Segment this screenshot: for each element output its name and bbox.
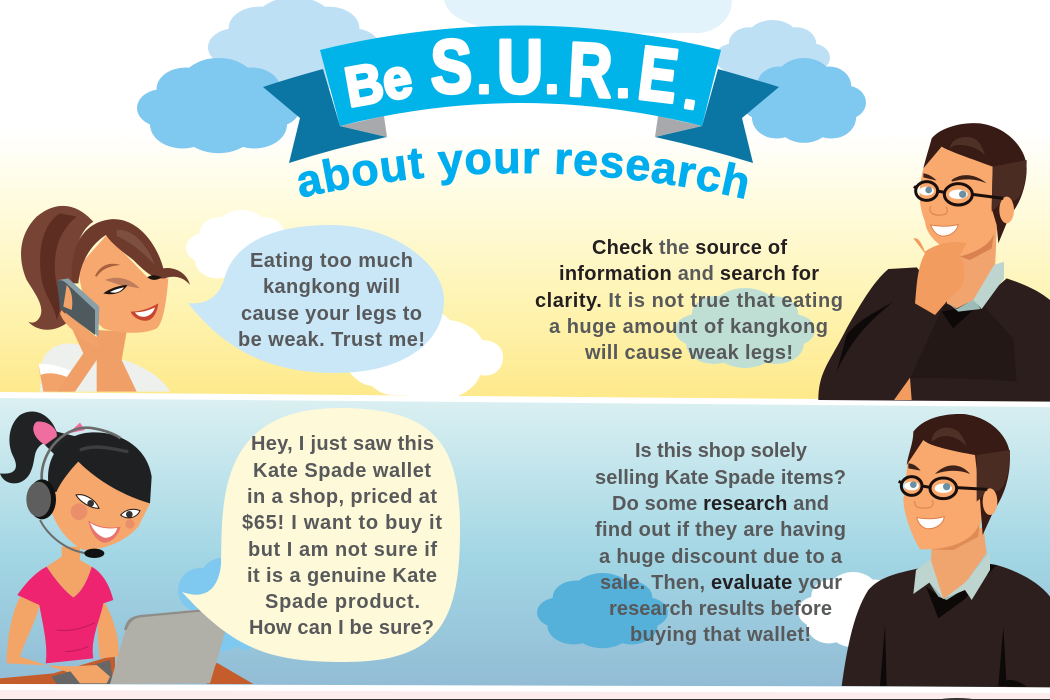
title banner: R — [566, 27, 614, 114]
title banner: Be — [340, 46, 417, 119]
text block: is this shop: selling Kate Spade items? — [595, 467, 846, 489]
text block: is this shop: buying that wallet! — [630, 624, 811, 646]
title banner: . — [616, 52, 630, 108]
text block: is this shop: Do some research and — [612, 493, 829, 515]
speech bubble 2 with laptop and woman: How can I be sure? — [249, 617, 434, 639]
speech bubble 2 with laptop and woman: in a shop, priced at — [247, 486, 437, 508]
title banner: E — [634, 31, 682, 119]
text block: check the source: clarity. It is not true that eating — [535, 290, 843, 312]
speech bubble 1: Eating too much — [250, 250, 413, 272]
panel: blue background — [0, 398, 1050, 687]
title header clouds — [137, 0, 866, 153]
speech bubble 1: kangkong will — [263, 276, 400, 298]
title banner: . — [545, 48, 559, 104]
speech bubble 2 with laptop and woman: Spade product. — [265, 591, 420, 613]
title banner: S — [430, 23, 473, 109]
speech bubble 2 with laptop and woman: Hey, I just saw this — [251, 433, 434, 455]
text block: is this shop: Is this shop solely — [635, 440, 808, 462]
speech bubble 2 with laptop and woman: it is a genuine Kate — [247, 565, 437, 587]
title banner — [263, 23, 779, 163]
speech bubble 2 with laptop and woman: but I am not sure if — [248, 539, 437, 561]
speech bubble 1 — [188, 225, 444, 373]
icon: man smiling — [842, 414, 1050, 687]
icon: man thinking — [818, 123, 1050, 402]
cloud: blue behind right text 2 — [537, 573, 668, 648]
icon: woman with phone — [21, 206, 190, 392]
text block: check the source: a huge amount of kangkong — [549, 316, 828, 338]
text block: is this shop: research results before — [609, 598, 832, 620]
title banner: . — [680, 63, 704, 120]
cloud: teal behind right text 1 — [675, 288, 815, 368]
icon: woman with headset and laptop — [0, 411, 253, 684]
speech bubble 2 with laptop and woman — [0, 408, 460, 684]
speech bubble 1: be weak. Trust me! — [238, 329, 425, 351]
panel: yellow background — [0, 0, 1050, 401]
text block: check the source: Check the source of — [592, 237, 787, 259]
text block: check the source: will cause weak legs! — [584, 342, 793, 364]
cloud: white behind speech bubble 1 — [186, 210, 503, 397]
speech bubble 2 with laptop and woman: $65! I want to buy it — [242, 512, 442, 534]
footer dark edge — [0, 698, 1050, 700]
title banner: U — [497, 24, 543, 109]
speech bubble 2 with laptop and woman: Kate Spade wallet — [253, 460, 431, 482]
text block: is this shop: find out if they are having — [595, 519, 846, 541]
text block: is this shop — [595, 440, 846, 646]
title banner: . — [477, 48, 491, 104]
text block: is this shop: sale. Then, evaluate your — [600, 572, 842, 594]
speech bubble 1: cause your legs to — [241, 303, 422, 325]
text block: is this shop: a huge discount due to a — [599, 546, 843, 568]
panel: pink footer strip — [0, 690, 1050, 700]
cloud: blue behind speech bubble 2 — [178, 558, 255, 651]
cloud: white behind man 2 — [798, 572, 908, 647]
subtitle: about your research: about your research — [298, 148, 748, 199]
text block: check the source: information and search for — [559, 263, 819, 285]
text block: check the source — [535, 237, 843, 364]
